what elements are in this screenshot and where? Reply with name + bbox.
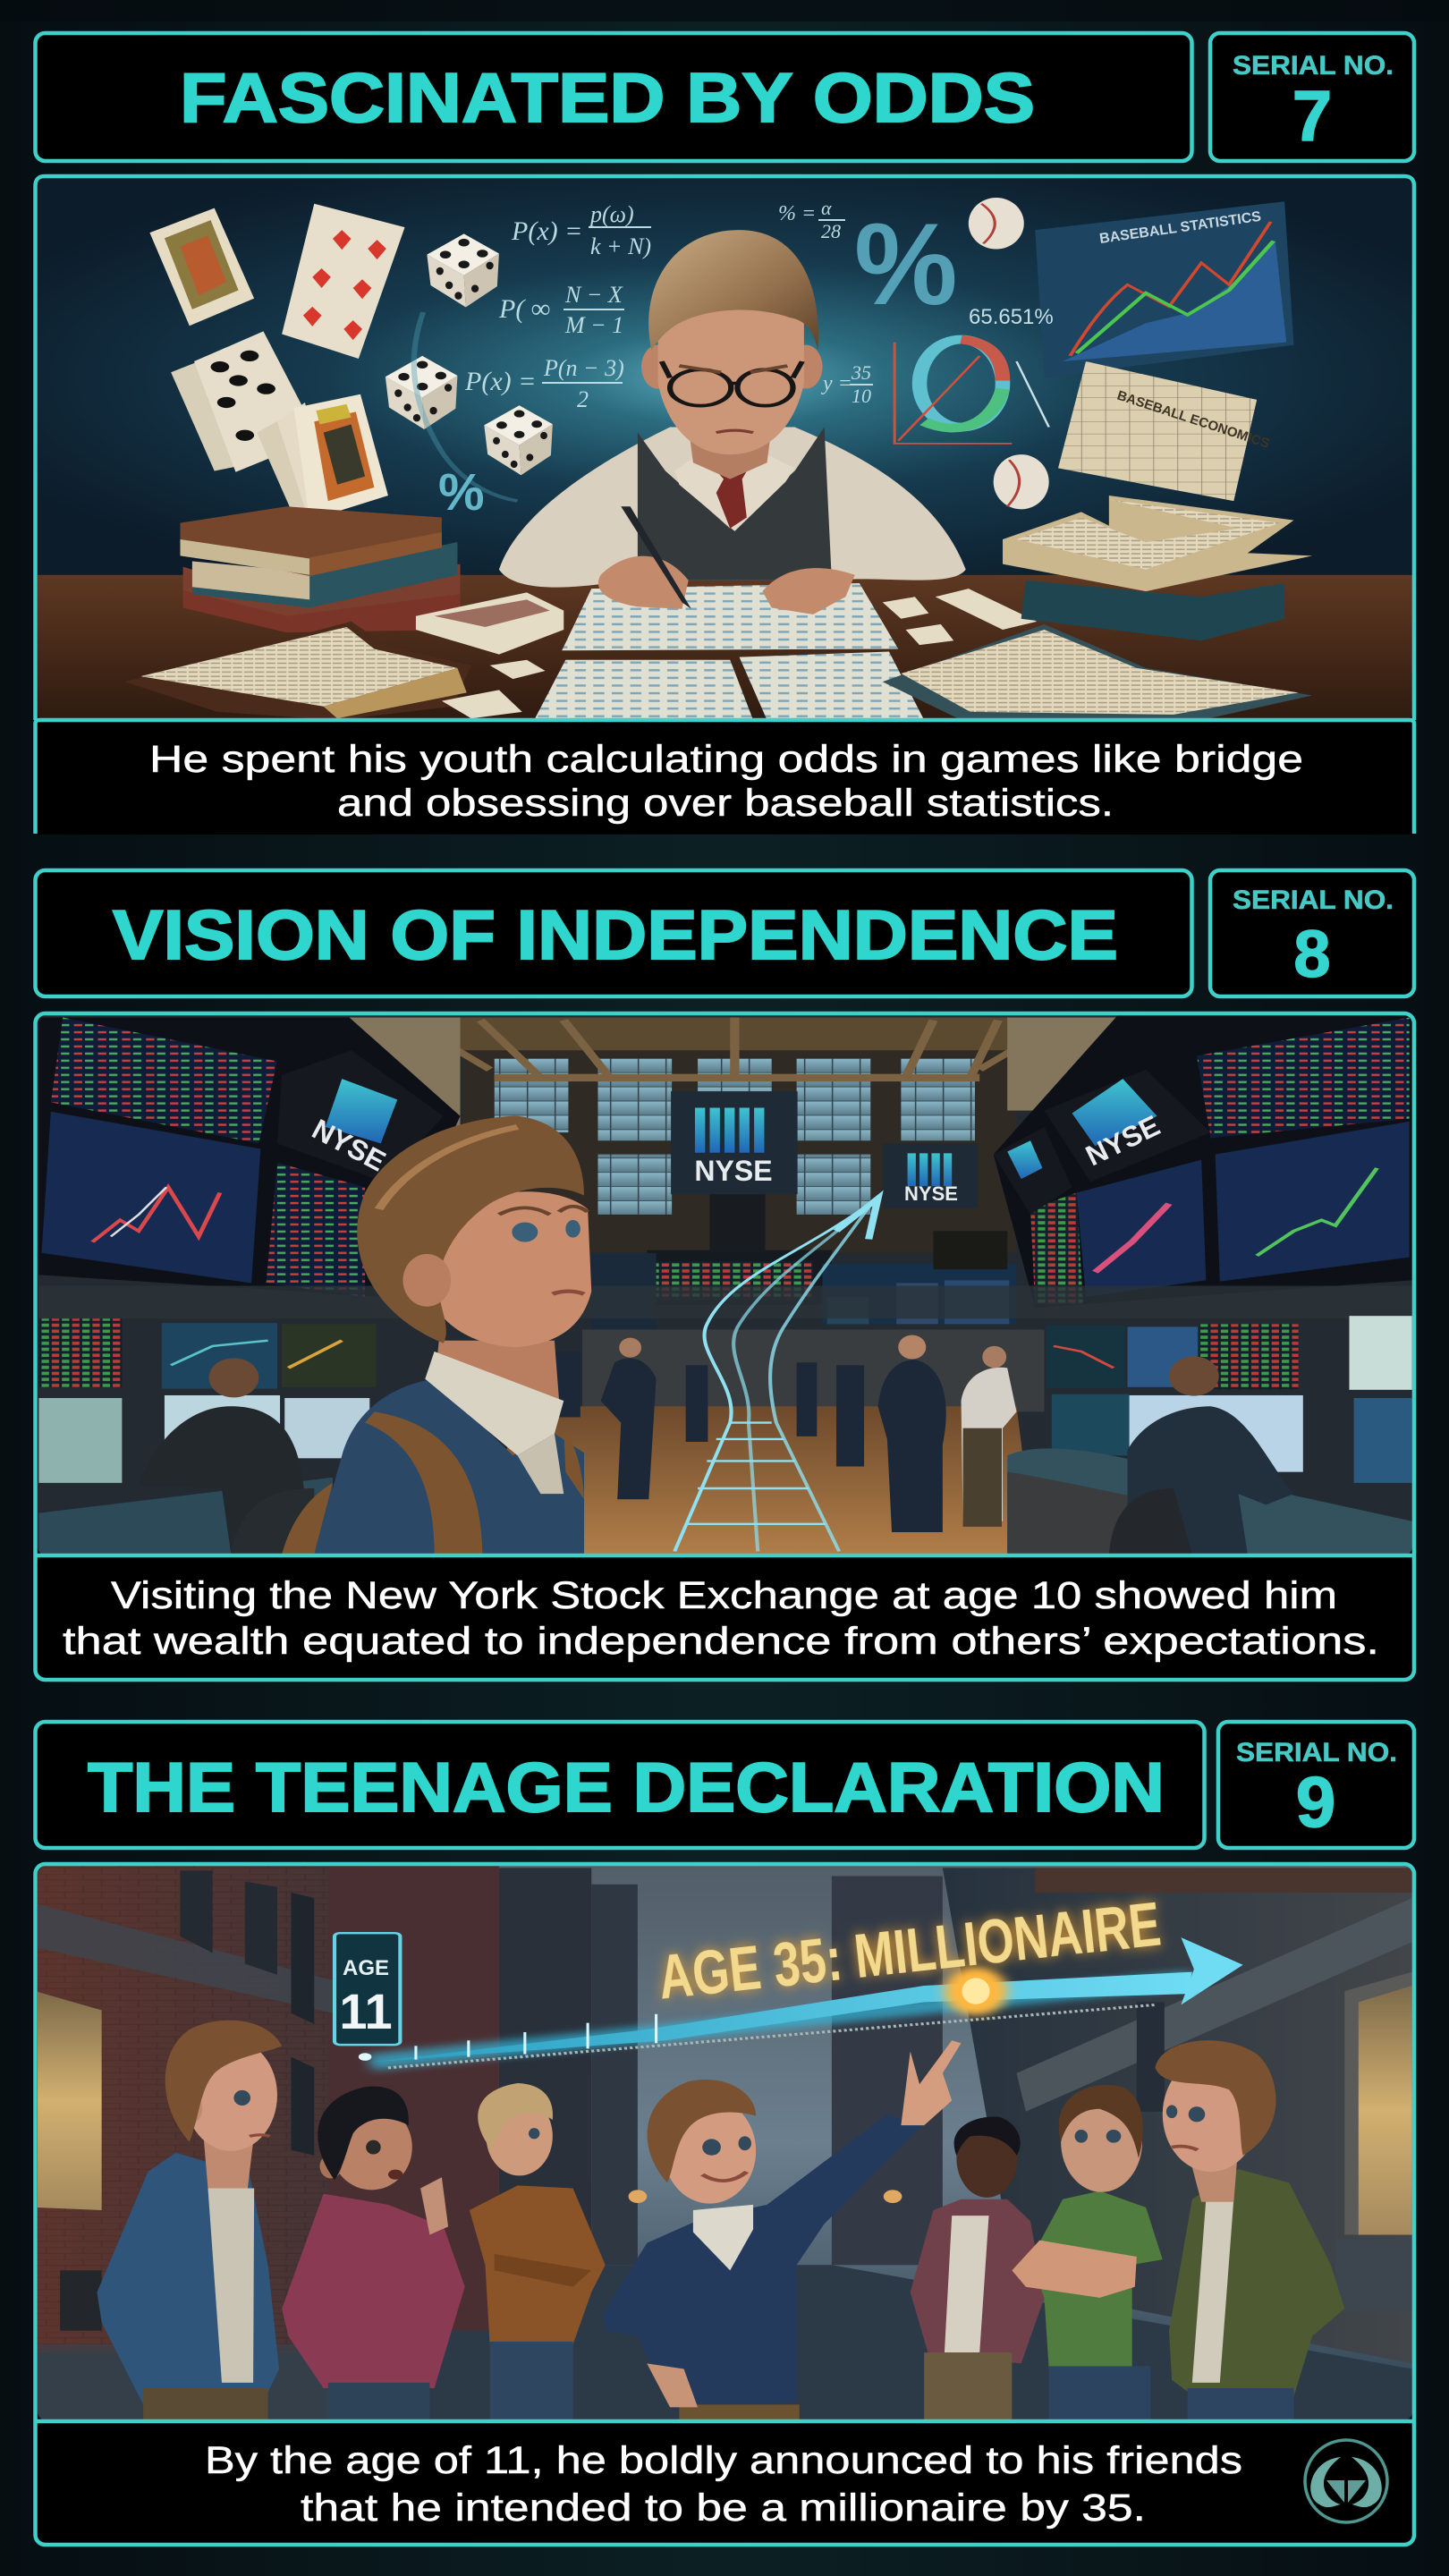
light text on the timeline [339,1888,1164,2039]
serial number 7 [1210,33,1414,161]
dice [427,233,499,307]
formulas on blackboard: 35 [851,361,871,384]
friend: maroon hoodie [282,2087,465,2421]
panel: the teenage declaration [35,1722,1414,2545]
formulas on blackboard: P( ∞ [498,294,550,324]
glowing timeline arrow [359,1937,1243,2068]
formulas on blackboard: P(x) = [511,216,582,246]
open books right [883,496,1312,720]
heading bar 7: FASCINATED BY ODDS [180,58,1035,137]
central NYSE sign [671,1091,978,1253]
NYSE labels [307,1109,1165,1205]
NYSE labels: NYSE [694,1155,773,1187]
caption 8: that wealth equated to independence from others’ expectations. [63,1620,1379,1663]
hall windows and roof [350,1018,1118,1305]
serial number 7: SERIAL NO. [1233,51,1394,80]
age 11 sign [335,1933,400,2045]
serial number 8 [1210,870,1414,996]
formulas on blackboard: y = [821,372,852,395]
friend: brown sweater [470,2083,606,2421]
formulas on blackboard: 10 [852,385,871,407]
formulas on blackboard [438,197,1271,521]
street [35,2265,1412,2421]
heading bar 7 [36,33,1191,161]
floating charts [894,198,1293,509]
left wall screens [38,1018,461,1297]
formulas on blackboard: 2 [577,386,589,412]
formulas on blackboard: M − 1 [564,312,623,338]
serial number 9 [1218,1722,1414,1848]
caption 9 [38,2421,1412,2545]
illustration: boy calculating odds [35,178,1414,723]
left buildings [35,1865,638,2421]
formulas on blackboard: 28 [821,220,841,242]
formulas on blackboard: α [821,197,832,219]
light text on the timeline: AGE [343,1956,389,1980]
caption 7 [36,720,1414,835]
boy looking up [282,1116,591,1554]
caption 8 [38,1555,1412,1679]
serial number 7: 7 [1292,76,1332,156]
boy pointing upward [603,2040,962,2421]
NYSE labels: NYSE [904,1182,958,1205]
illustration: boys on a street [35,1865,1414,2421]
panel: vision of independence [35,870,1414,1680]
formulas on blackboard: % [854,199,958,329]
playing cards [149,204,405,531]
panel frame 8 [36,1013,1414,1680]
serial number 8: SERIAL NO. [1233,886,1394,915]
heading bar 8 [36,870,1191,996]
right wall screens [994,1014,1412,1308]
caption 9: By the age of 11, he boldly announced to his friends [205,2439,1242,2482]
panel: fascinated by odds [35,33,1414,835]
serial number 9: SERIAL NO. [1236,1738,1397,1767]
friend: plaid shirt [911,2116,1045,2421]
people in the hall [553,1335,1017,1532]
formulas on blackboard: N − X [564,282,623,308]
panel frame 7 [36,176,1414,720]
serial number 8: 8 [1293,917,1331,991]
mid-distance screens [38,1231,1412,1411]
trading floor [480,1406,1035,1554]
friend: olive jacket [1156,2040,1344,2421]
open book left [124,622,471,720]
worksheets on table [534,583,924,720]
NYSE labels: NYSE [1080,1109,1165,1172]
deck of cards [416,592,564,655]
traders and desks right [1007,1316,1412,1554]
formulas on blackboard: p(ω) [589,201,634,227]
caption 9: that he intended to be a millionaire by 35. [301,2487,1146,2529]
friend: green shirt [1012,2085,1163,2421]
heading bar 9: THE TEENAGE DECLARATION [88,1748,1165,1826]
formulas on blackboard: 65.651% [969,305,1054,329]
caption 7: and obsessing over baseball statistics. [337,782,1114,825]
formulas on blackboard: k + N) [590,233,651,259]
formulas on blackboard: % = [778,202,816,225]
friend: blue hoodie [97,2021,282,2421]
formulas on blackboard: P(x) = [464,367,536,396]
right buildings [832,1868,1414,2363]
formulas on blackboard: P(n − 3) [543,355,624,381]
serial number 9: 9 [1296,1762,1335,1842]
heading bar 9 [36,1722,1204,1848]
formulas on blackboard: BASEBALL ECONOMICS [1115,388,1271,452]
panel frame 9 [36,1864,1414,2545]
stack of books [180,506,461,632]
light text on the timeline: AGE 35: MILLIONAIRE [655,1888,1164,2012]
caption 7: He spent his youth calculating odds in games like bridge [149,738,1303,781]
illustration: boy at stock exchange [35,1014,1414,1557]
logo emblem [1305,2440,1387,2522]
boy [499,230,966,614]
heading bar 8: VISION OF INDEPENDENCE [113,895,1118,974]
table [35,575,1414,723]
caption 8: Visiting the New York Stock Exchange at age 10 showed him [111,1574,1337,1617]
NYSE labels: NYSE [307,1113,391,1178]
formulas on blackboard: BASEBALL STATISTICS [1098,209,1262,247]
light text on the timeline: 11 [339,1983,393,2039]
traders and desks left [38,1318,377,1554]
glowing path arrow [674,1199,878,1551]
formulas on blackboard: % [438,463,485,521]
